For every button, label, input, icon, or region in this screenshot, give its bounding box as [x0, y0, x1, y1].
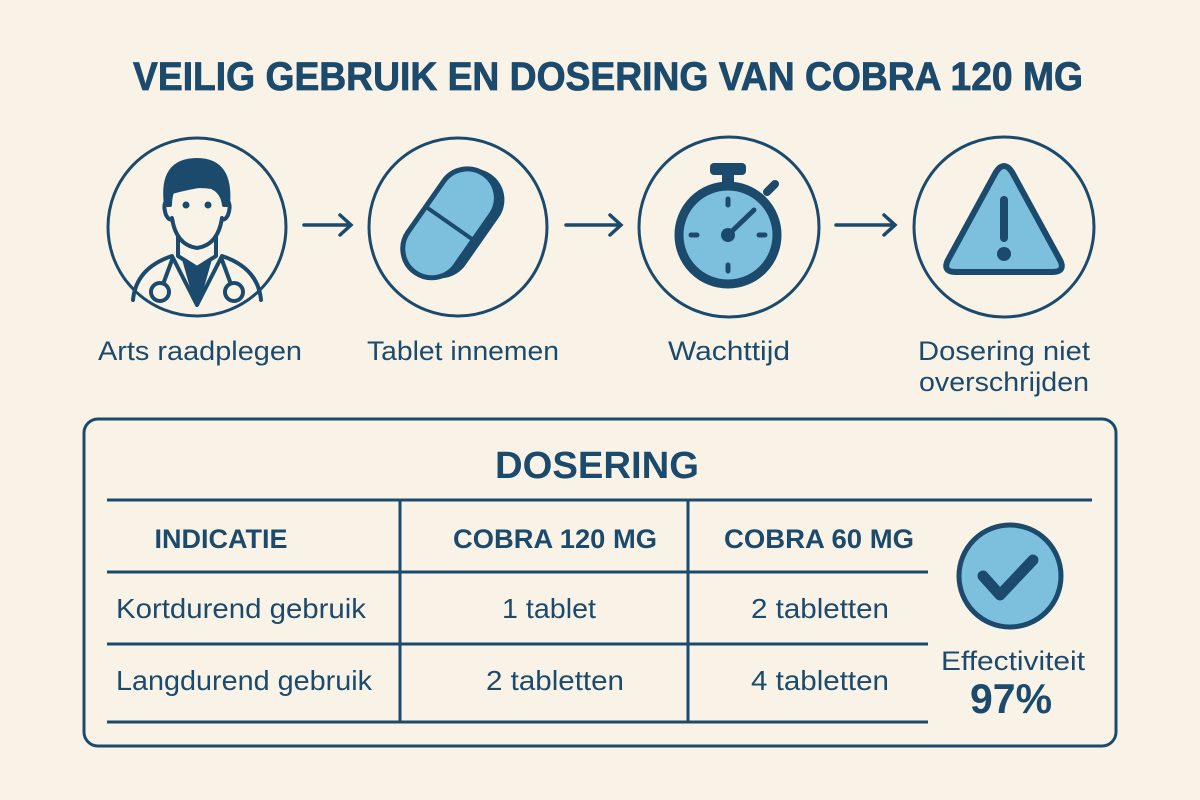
- label: Arts raadplegen: [98, 336, 302, 366]
- arrow 3: [836, 215, 895, 235]
- step 2: tablet innemen: [367, 138, 559, 366]
- icon: doctor: [133, 160, 261, 305]
- step 4: dosering niet overschrijden: overschrijden: [919, 367, 1089, 397]
- table rows: Kortdurend gebruik: [116, 593, 367, 624]
- table rows: 2 tabletten: [486, 665, 624, 696]
- effectiveness stat: Effectiviteit: [941, 646, 1086, 676]
- effectiveness stat: 97%: [970, 675, 1052, 722]
- table header row: INDICATIE: [154, 524, 288, 554]
- label: Tablet innemen: [367, 336, 559, 366]
- label: Wachttijd: [668, 336, 790, 366]
- step 1: arts raadplegen: [98, 138, 302, 366]
- step 3: wachttijd: [639, 137, 819, 366]
- panel: dosering table: [84, 419, 1116, 746]
- icon: check badge: [959, 525, 1061, 627]
- effectiveness stat: [941, 646, 1086, 722]
- title: VEILIG GEBRUIK EN DOSERING VAN COBRA 120 MG: [133, 55, 1083, 99]
- table header row: COBRA 60 MG: [724, 524, 914, 554]
- table rows: [116, 593, 889, 696]
- arrow 1: [304, 215, 351, 235]
- table rows: 2 tabletten: [751, 593, 889, 624]
- table header row: COBRA 120 MG: [453, 524, 657, 554]
- label: Dosering niet: [918, 336, 1091, 366]
- arrow 2: [566, 215, 621, 235]
- icon: warning: [946, 166, 1062, 272]
- table rows: 4 tabletten: [751, 665, 889, 696]
- table rows: Langdurend gebruik: [116, 665, 373, 696]
- table heading: DOSERING: [495, 445, 699, 487]
- icon: stopwatch: [679, 163, 777, 284]
- table rows: 1 tablet: [502, 593, 596, 624]
- icon: pill: [391, 154, 517, 294]
- table header row: [154, 524, 914, 554]
- step 4: dosering niet overschrijden: [914, 137, 1094, 397]
